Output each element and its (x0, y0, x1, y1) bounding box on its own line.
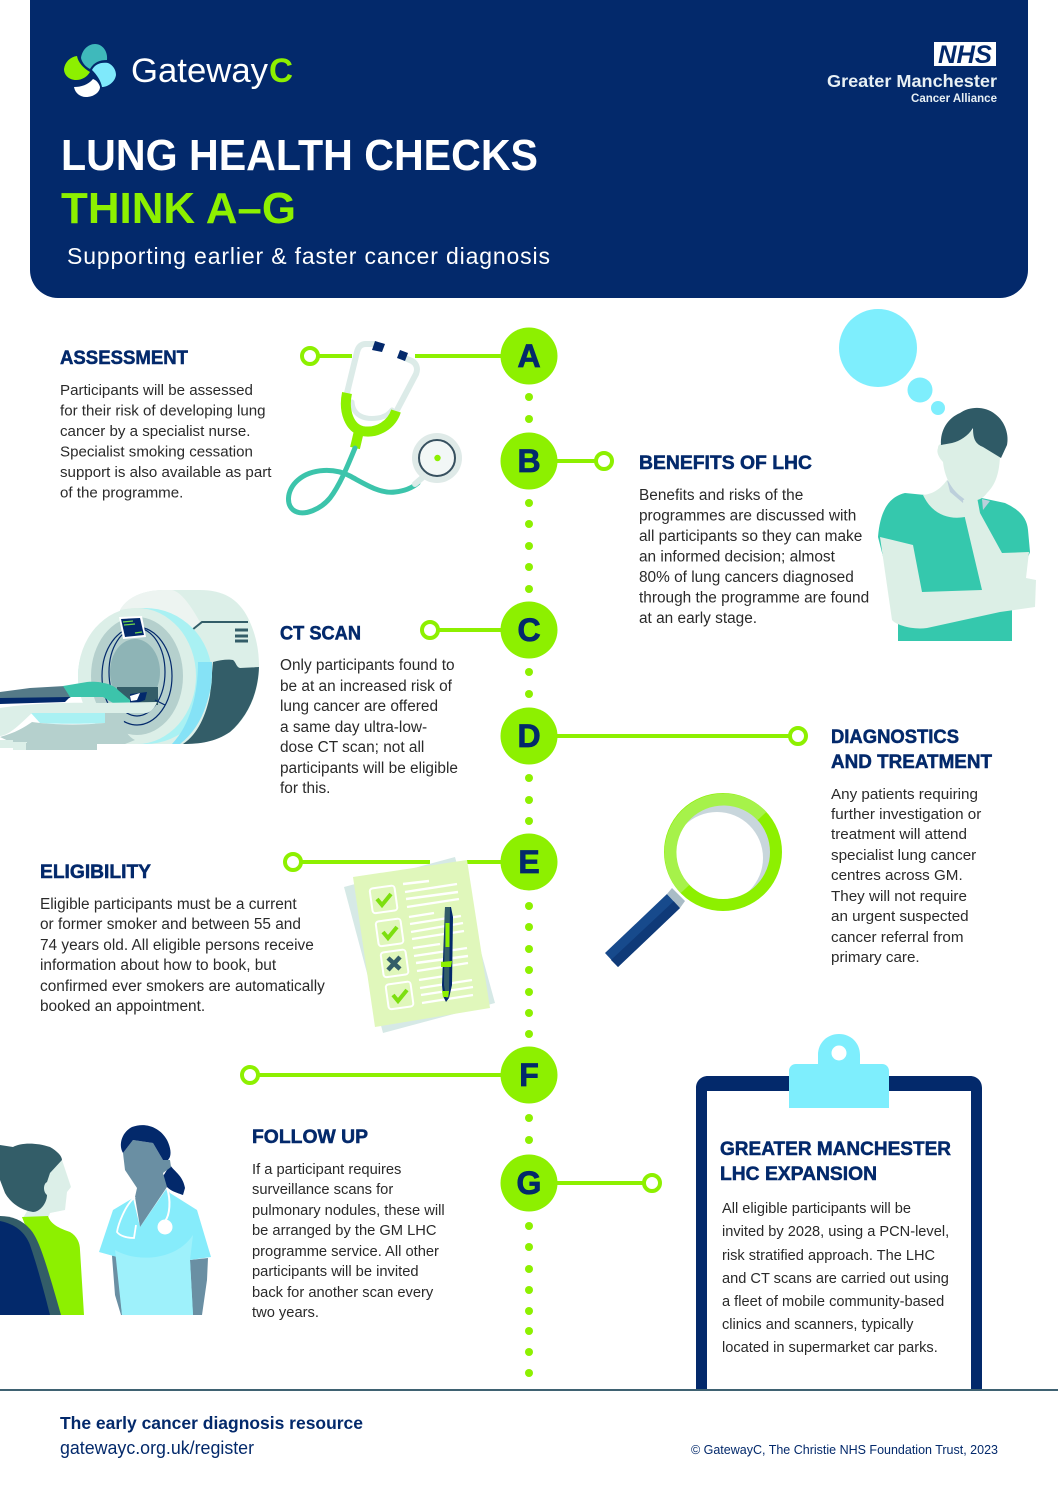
panel: eligibility (40, 862, 325, 1015)
timeline letter badges: B (517, 443, 541, 479)
header banner (30, 0, 1028, 298)
text: benefits: all participants so they can make (639, 528, 862, 545)
text: diagnostics: They will not require (831, 888, 967, 905)
text: GM expansion: clinics and scanners, typically (722, 1317, 914, 1333)
clipboard clip (789, 1034, 889, 1108)
NHS logo: Greater Manchester (827, 71, 997, 91)
text: follow up: be arranged by the GM LHC (252, 1223, 437, 1239)
title: LUNG HEALTH CHECKS (61, 131, 538, 180)
heading: follow up: FOLLOW UP (252, 1127, 368, 1148)
text: follow up: surveillance scans for (252, 1182, 393, 1198)
clipboard frame (696, 1076, 982, 1391)
heading: assessment: ASSESSMENT (60, 348, 188, 369)
panel: clipboard, Greater Manchester LHC expansion (696, 1034, 982, 1391)
text: eligibility: confirmed ever smokers are automatically (40, 978, 325, 995)
panel: benefits of LHC (639, 453, 869, 627)
heading: GM expansion: GREATER MANCHESTER (720, 1139, 951, 1160)
heading: CT scan: CT SCAN (280, 624, 361, 644)
footer link: gatewayc.org.uk/register (60, 1438, 254, 1458)
text: GM expansion: located in supermarket car parks. (722, 1340, 938, 1356)
text: assessment: Specialist smoking cessation (60, 443, 253, 460)
title accent: THINK A–G (61, 184, 296, 233)
text: diagnostics: centres across GM. (831, 867, 963, 884)
text: CT scan: dose CT scan; not all (280, 739, 424, 756)
text: assessment: cancer by a specialist nurse. (60, 423, 250, 440)
text: benefits: at an early stage. (639, 610, 757, 627)
panel: assessment (60, 348, 272, 501)
icon: CT scanner (0, 590, 259, 750)
text: CT scan: for this. (280, 780, 330, 797)
text: GM expansion: invited by 2028, using a PCN-level, (722, 1224, 949, 1240)
logo wordmark: Gateway (131, 52, 268, 90)
panel: follow up (252, 1127, 445, 1321)
text: eligibility: information about how to book, but (40, 957, 277, 974)
timeline letter badges: E (518, 844, 540, 880)
text: assessment: for their risk of developing lung (60, 402, 266, 419)
timeline letter badges: D (517, 718, 541, 754)
text: diagnostics: further investigation or (831, 806, 981, 823)
connector end rings (242, 348, 806, 1191)
text: CT scan: Only participants found to (280, 657, 455, 674)
icon: patient and nurse (0, 1125, 211, 1315)
text: GM expansion: risk stratified approach. The LHC (722, 1248, 935, 1264)
text: benefits: 80% of lung cancers diagnosed (639, 569, 854, 586)
text: diagnostics: cancer referral from (831, 929, 964, 946)
panel: diagnostics and treatment (831, 727, 992, 966)
text: assessment: support is also available as part (60, 464, 272, 481)
text: GM expansion: All eligible participants will be (722, 1201, 911, 1217)
text: eligibility: or former smoker and between 55 and (40, 916, 301, 933)
text: benefits: Benefits and risks of the (639, 487, 803, 504)
text: follow up: pulmonary nodules, these will (252, 1203, 445, 1219)
timeline letter badges (500, 328, 558, 1212)
text: benefits: an informed decision; almost (639, 548, 836, 565)
text: eligibility: 74 years old. All eligible persons receive (40, 937, 314, 954)
panel: CT scan (280, 624, 458, 797)
text: benefits: through the programme are found (639, 589, 869, 606)
NHS logo: Cancer Alliance (911, 91, 997, 105)
icon: stethoscope (288, 341, 462, 513)
timeline letter badges: A (517, 338, 541, 374)
subtitle: Supporting earlier & faster cancer diagnosis (67, 243, 550, 269)
timeline connectors (258, 356, 790, 1183)
text: assessment: of the programme. (60, 484, 183, 501)
text: follow up: two years. (252, 1305, 319, 1321)
text: diagnostics: specialist lung cancer (831, 847, 976, 864)
footer (0, 1389, 1058, 1458)
text: follow up: back for another scan every (252, 1285, 434, 1301)
heading: diagnostics and treatment: DIAGNOSTICS (831, 727, 959, 748)
timeline letter badges: C (517, 612, 541, 648)
timeline dots (525, 393, 533, 1377)
heading: diagnostics and treatment: AND TREATMENT (831, 752, 992, 773)
text: diagnostics: primary care. (831, 949, 920, 966)
heading: eligibility: ELIGIBILITY (40, 862, 151, 883)
timeline letter badges: G (517, 1165, 541, 1201)
NHS logo (827, 41, 997, 105)
text: CT scan: lung cancer are offered (280, 698, 438, 715)
text: diagnostics: Any patients requiring (831, 786, 978, 803)
footer resource title: The early cancer diagnosis resource (60, 1413, 363, 1433)
text: benefits: programmes are discussed with (639, 507, 856, 524)
text: eligibility: booked an appointment. (40, 998, 205, 1015)
text: CT scan: a same day ultra-low- (280, 719, 427, 736)
text: diagnostics: treatment will attend (831, 826, 967, 843)
text: follow up: programme service. All other (252, 1244, 439, 1260)
text: GM expansion: a fleet of mobile community-based (722, 1294, 944, 1310)
text: CT scan: be at an increased risk of (280, 678, 453, 695)
text: GM expansion: and CT scans are carried out using (722, 1271, 949, 1287)
copyright: © GatewayC, The Christie NHS Foundation Trust, 2023 (691, 1443, 998, 1457)
text: CT scan: participants will be eligible (280, 760, 458, 777)
NHS logo: NHS (938, 41, 992, 69)
icon: magnifying glass (605, 799, 776, 967)
icon: checklist and pen (344, 857, 495, 1033)
icon: thinking person (839, 309, 1036, 641)
icon: GatewayC logo (64, 44, 116, 97)
heading: GM expansion: LHC EXPANSION (720, 1164, 877, 1185)
heading: benefits: BENEFITS OF LHC (639, 453, 812, 474)
text: follow up: If a participant requires (252, 1162, 401, 1178)
timeline letter badges: F (519, 1057, 539, 1093)
text: assessment: Participants will be assessed (60, 382, 253, 399)
text: diagnostics: an urgent suspected (831, 908, 969, 925)
text: eligibility: Eligible participants must be a current (40, 896, 297, 913)
text: follow up: participants will be invited (252, 1264, 419, 1280)
logo wordmark: C (269, 52, 293, 90)
